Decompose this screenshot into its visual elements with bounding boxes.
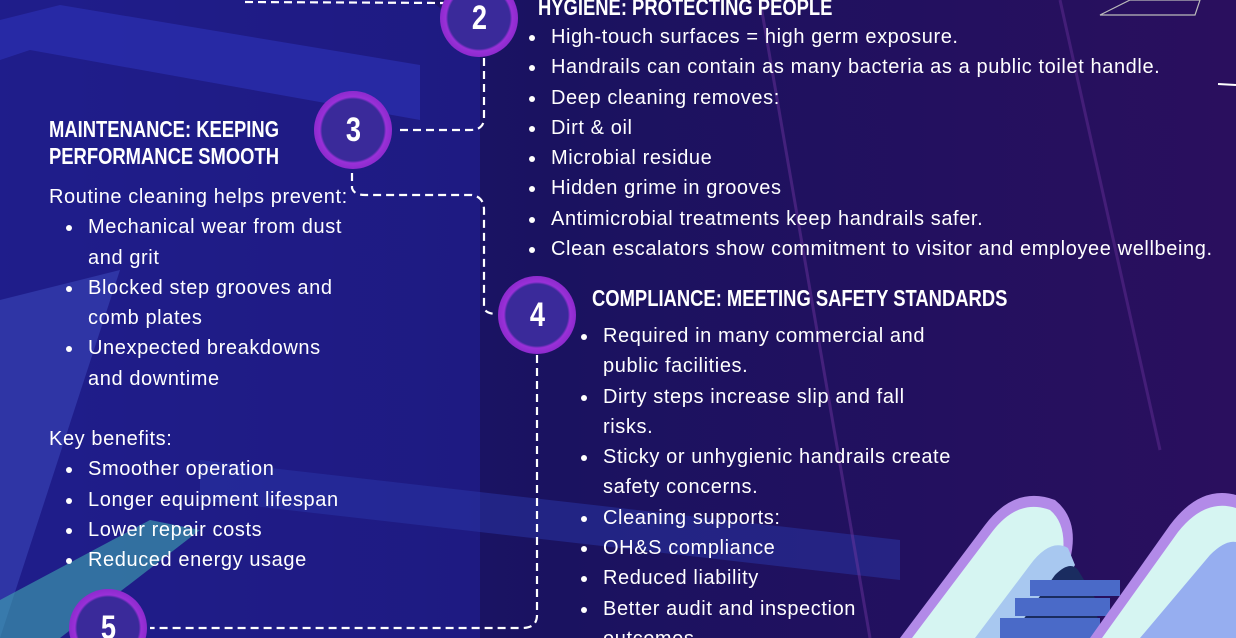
step 3 badge: 3 <box>345 111 361 149</box>
escalator illustration <box>900 493 1236 638</box>
compliance list <box>581 325 951 638</box>
maintenance text: Routine cleaning helps prevent: <box>49 186 348 208</box>
heading: compliance: COMPLIANCE: MEETING SAFETY STANDARDS <box>592 285 1007 311</box>
hygiene list: Handrails can contain as many bacteria as a public toilet handle. <box>551 56 1160 78</box>
step 4 badge <box>498 276 576 354</box>
compliance list: safety concerns. <box>603 476 758 498</box>
compliance list: risks. <box>603 416 653 438</box>
maintenance text: Mechanical wear from dust <box>88 216 342 238</box>
hygiene list: Deep cleaning removes: <box>551 87 780 109</box>
maintenance text <box>49 186 348 571</box>
step 3 badge <box>314 91 392 169</box>
compliance list: Required in many commercial and <box>603 325 925 347</box>
heading: maintenance <box>49 116 279 169</box>
compliance list: public facilities. <box>603 355 748 377</box>
step 5 badge <box>69 589 147 638</box>
compliance list: OH&S compliance <box>603 537 775 559</box>
maintenance text: and grit <box>88 247 160 269</box>
heading: maintenance: PERFORMANCE SMOOTH <box>49 143 279 169</box>
maintenance text: comb plates <box>88 307 202 329</box>
maintenance text: and downtime <box>88 368 220 390</box>
maintenance text: Smoother operation <box>88 458 274 480</box>
hygiene list: High-touch surfaces = high germ exposure. <box>551 26 959 48</box>
hygiene list: Antimicrobial treatments keep handrails safer. <box>551 208 983 230</box>
compliance list: Better audit and inspection <box>603 598 856 620</box>
heading: maintenance: MAINTENANCE: KEEPING <box>49 116 279 142</box>
hygiene list: Clean escalators show commitment to visitor and employee wellbeing. <box>551 238 1213 260</box>
maintenance text: Reduced energy usage <box>88 549 307 571</box>
hygiene list <box>529 26 1213 260</box>
hygiene list: Microbial residue <box>551 147 712 169</box>
compliance list: Sticky or unhygienic handrails create <box>603 446 951 468</box>
maintenance text: Blocked step grooves and <box>88 277 333 299</box>
step 2 badge: 2 <box>471 0 487 37</box>
hygiene list: Dirt & oil <box>551 117 633 139</box>
compliance list: Reduced liability <box>603 567 759 589</box>
maintenance text: Unexpected breakdowns <box>88 337 321 359</box>
compliance list: Cleaning supports: <box>603 507 781 529</box>
step 4 badge: 4 <box>529 296 545 334</box>
step 2 badge <box>440 0 518 57</box>
maintenance text: Longer equipment lifespan <box>88 489 339 511</box>
hygiene list: Hidden grime in grooves <box>551 177 782 199</box>
maintenance text: Key benefits: <box>49 428 172 450</box>
maintenance text: Lower repair costs <box>88 519 262 541</box>
compliance list: Dirty steps increase slip and fall <box>603 386 905 408</box>
